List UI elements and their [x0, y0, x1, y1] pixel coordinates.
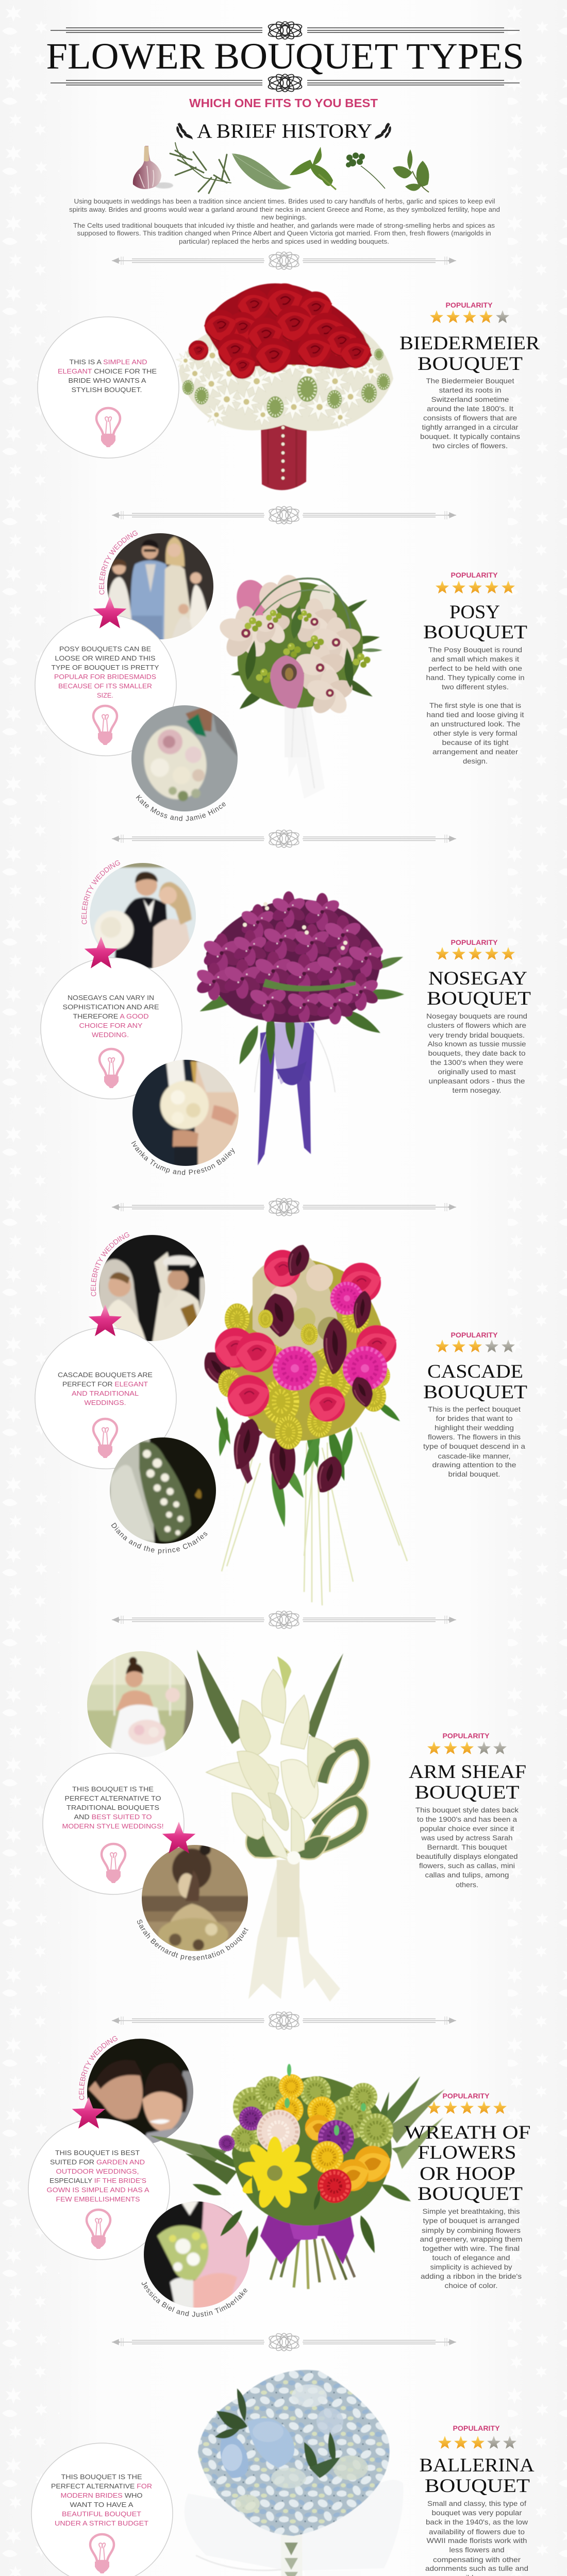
- caption: Jessica Biel and Justin Timberlake: [141, 2281, 247, 2317]
- panel: ballerina bouquet: [31, 2370, 535, 2576]
- panel: posy bouquet: [35, 531, 527, 821]
- heading: posy bouquet: BOUQUET: [423, 622, 527, 643]
- tip text: THIS BOUQUET IS BEST: [55, 2149, 140, 2157]
- description: [425, 2499, 528, 2576]
- icon: herb sprig: [393, 149, 429, 192]
- description: simplicity is achieved by: [430, 2263, 512, 2271]
- description: [420, 377, 520, 450]
- tip text: AND TRADITIONAL: [72, 1389, 139, 1397]
- celebrity photo: justin timberlake and jessica biel: [79, 2036, 193, 2143]
- description: bouquet. It typically contains: [420, 432, 520, 440]
- tip circle: [28, 2119, 170, 2260]
- tip circle: [31, 2443, 173, 2576]
- description: tightly arranged in a circular: [422, 423, 519, 431]
- tip text: FEW EMBELLISHMENTS: [56, 2195, 140, 2203]
- description: Switzerland sometime: [431, 395, 509, 403]
- description: two circles of flowers.: [432, 442, 508, 450]
- heading: ballerina bouquet: BOUQUET: [425, 2476, 530, 2497]
- description: highlight their wedding: [435, 1423, 514, 1432]
- description: started its roots in: [439, 386, 501, 394]
- icon: garlic: [133, 146, 173, 189]
- history text block: supposed to flowers. This tradition changed when Prince Albert and Queen Victoria got married. From then, fresh flowers (marigolds in: [77, 230, 491, 237]
- celebrity photo: ivanka trump and husband: [81, 860, 196, 969]
- description: [415, 1806, 519, 1889]
- title: FLOWER BOUQUET TYPES: [46, 36, 524, 77]
- tip text: THIS BOUQUET IS THE: [61, 2473, 142, 2481]
- heading: biedermeier bouquet: [399, 333, 540, 375]
- photo: bride on swing: [87, 1651, 193, 1752]
- description: bridal bouquet.: [448, 1470, 500, 1478]
- description: other style is very formal: [433, 729, 518, 737]
- celebrity bouquet photo: sarah bernardt: [137, 1845, 248, 1960]
- popularity stars: 5 of 5: [436, 581, 515, 594]
- tip circle: [41, 958, 182, 1099]
- description: simply by combining flowers: [422, 2226, 521, 2234]
- popularity label: POPULARITY: [445, 301, 493, 309]
- description: adornments such as tulle and: [425, 2564, 528, 2572]
- tip text: UNDER A STRICT BUDGET: [55, 2519, 148, 2527]
- description: drawing attention to the: [432, 1461, 516, 1469]
- tip text: WANT TO HAVE A: [70, 2501, 134, 2509]
- tip text: LOOSE OR WIRED AND THIS: [55, 654, 156, 662]
- tip text: [62, 1785, 164, 1830]
- heading: arm sheaf bouquet: ARM SHEAF: [409, 1761, 526, 1783]
- bouquet image: purple alstroemeria with ribbon: [194, 891, 405, 1165]
- tip text: NOSEGAYS CAN VARY IN: [68, 994, 154, 1002]
- description: bouquet was very popular: [432, 2509, 522, 2517]
- tip text: BRIDE WHO WANTS A: [68, 377, 146, 384]
- tip text: MODERN STYLE WEDDINGS!: [62, 1822, 164, 1830]
- description: callas and tulips, among: [425, 1871, 509, 1879]
- icon: rosemary: [170, 143, 231, 193]
- description: hand. They typically come in: [426, 673, 525, 682]
- celebrity photo: kate moss wedding party: [99, 531, 213, 639]
- tip text: POPULAR FOR BRIDESMAIDS: [54, 673, 156, 681]
- icon: pink star: [72, 2097, 105, 2129]
- description: the 1300's when they were: [430, 1058, 523, 1066]
- celebrity photo: diana and prince charles: [91, 1232, 205, 1341]
- icon: light bulb: [87, 2210, 110, 2249]
- history text block: [69, 198, 500, 245]
- description: WWII made florists work with: [427, 2536, 527, 2545]
- icon: parsley: [346, 152, 385, 189]
- popularity label: POPULARITY: [442, 1732, 490, 1740]
- heading: cascade bouquet: BOUQUET: [423, 1382, 527, 1403]
- panel: nosegay bouquet: [40, 860, 531, 1175]
- tip text: THIS IS A SIMPLE AND: [69, 358, 147, 366]
- description: was used by actress Sarah: [421, 1834, 512, 1842]
- tip text: [63, 994, 159, 1039]
- popularity stars: 3 of 5: [427, 1741, 507, 1754]
- heading: ballerina bouquet: [420, 2455, 535, 2497]
- tip text: [46, 2149, 149, 2203]
- celebrity bouquet photo: [110, 1437, 216, 1555]
- history text block: The Celts used traditional bouquets that inlcuded ivy thistle and heather, and garlands were made of strong-smelling herbs and spices as: [73, 222, 495, 229]
- description: The Biedermeier Bouquet: [426, 377, 514, 385]
- tip text: [58, 358, 157, 394]
- bouquet image: red roses and white star flowers: [176, 283, 393, 490]
- tip text: TYPE OF BOUQUET IS PRETTY: [52, 664, 159, 671]
- history text block: new beginings.: [261, 214, 307, 221]
- icon: pink star: [162, 1822, 195, 1854]
- popularity label: POPULARITY: [451, 938, 498, 946]
- popularity stars: 3 of 5: [436, 1340, 515, 1352]
- heading: wreath of flowers or hoop bouquet: FLOWERS: [418, 2142, 516, 2163]
- description: choice of color.: [444, 2281, 498, 2290]
- description: because of its tight: [442, 738, 509, 747]
- description: beautifully displays elongated: [416, 1852, 518, 1860]
- description: touch of elegance and: [432, 2253, 510, 2262]
- description: others.: [456, 1880, 478, 1889]
- bouquet image: hot pink cascade: [198, 1242, 407, 1605]
- description: an unstructured look. The: [430, 720, 521, 728]
- description: This bouquet style dates back: [415, 1806, 519, 1814]
- herbs row: [133, 143, 429, 193]
- heading: wreath of flowers or hoop bouquet: BOUQUET: [418, 2183, 523, 2205]
- bouquet image: posy of orchids and calla: [217, 575, 382, 799]
- bouquet image: blue hydrangea with tulle: [185, 2370, 403, 2576]
- tip text: SOPHISTICATION AND ARE: [63, 1003, 159, 1011]
- popularity label: POPULARITY: [451, 1331, 498, 1339]
- description: together with wire. The final: [423, 2244, 520, 2252]
- caption: Diana and the prince Charles: [111, 1522, 207, 1555]
- heading: posy bouquet: [423, 602, 527, 643]
- tip text: BEAUTIFUL BOUQUET: [62, 2510, 141, 2518]
- description: originally used to mast: [438, 1067, 516, 1076]
- popularity label: POPULARITY: [442, 2092, 490, 2100]
- description: [423, 1405, 525, 1478]
- description: around the late 1800's. It: [427, 404, 513, 413]
- tip text: [58, 1371, 153, 1406]
- header ornament top: [51, 20, 520, 41]
- header ornament bottom: [51, 72, 520, 94]
- icon: light bulb: [96, 408, 120, 447]
- celebrity bouquet photo: [141, 2201, 250, 2317]
- tip text: PERFECT ALTERNATIVE TO: [65, 1794, 161, 1802]
- tip text: [52, 645, 159, 699]
- history text block: particular) replaced the herbs and spices used in wedding bouquets.: [179, 238, 389, 245]
- icon: pink star: [89, 1304, 122, 1336]
- heading: wreath of flowers or hoop bouquet: WREATH OF: [404, 2122, 531, 2143]
- description: less flowers and: [449, 2546, 504, 2554]
- description: perfect to be held with one: [428, 664, 522, 672]
- tip circle: [35, 615, 176, 756]
- description: flowers, such as callas, mini: [419, 1861, 515, 1870]
- icon: bay leaf: [232, 154, 291, 190]
- description: [426, 1012, 527, 1094]
- description: and greenery, wrapping them: [420, 2235, 523, 2243]
- description: compensating with other: [433, 2555, 521, 2564]
- heading: arm sheaf bouquet: BOUQUET: [414, 1782, 520, 1803]
- description: adding a ribbon in the bride's: [421, 2272, 522, 2280]
- heading: posy bouquet: POSY: [449, 602, 500, 623]
- description: [420, 2207, 523, 2290]
- description: Simple yet breathtaking, this: [423, 2207, 520, 2215]
- description: unpleasant odors - thus the: [429, 1077, 525, 1085]
- popularity label: POPULARITY: [451, 571, 498, 579]
- tip text: CHOICE FOR ANY: [79, 1022, 143, 1029]
- panel: cascade bouquet: [35, 1232, 527, 1606]
- description: Bernardt. This bouquet: [427, 1843, 507, 1851]
- caption arc: CELEBRITY WEDDING: [91, 1232, 130, 1296]
- heading: arm sheaf bouquet: [409, 1761, 526, 1803]
- description: The Posy Bouquet is round: [428, 646, 522, 654]
- heading: nosegay bouquet: [427, 968, 531, 1009]
- description: for brides that want to: [436, 1414, 513, 1422]
- description: hand tied and loose giving it: [427, 710, 524, 719]
- icon: light bulb: [102, 1844, 125, 1883]
- icon: left laurel: [176, 122, 193, 140]
- description: arrangement and neater: [432, 748, 518, 756]
- description: The first style is one that is: [429, 701, 521, 709]
- tip text: WEDDINGS.: [85, 1399, 126, 1406]
- caption: Ivanka Trump and Preston Bailey: [131, 1141, 235, 1175]
- celebrity bouquet photo: [131, 705, 238, 821]
- tip text: [51, 2473, 152, 2527]
- caption: Sarah Bernardt presentation bouquet: [137, 1920, 248, 1960]
- description: type of bouquet is arranged: [423, 2216, 520, 2225]
- icon: light bulb: [99, 1049, 123, 1088]
- icon: light bulb: [90, 2534, 114, 2573]
- tip text: WEDDING.: [92, 1031, 129, 1039]
- tip text: PERFECT FOR ELEGANT: [62, 1380, 148, 1388]
- description: type of bouquet descend in a: [423, 1442, 525, 1450]
- tip circle: [38, 317, 179, 458]
- description: to the 1900's and has been a: [417, 1815, 517, 1823]
- tip text: GOWN IS SIMPLE AND HAS A: [46, 2186, 149, 2194]
- description: two different styles.: [442, 683, 509, 691]
- icon: light bulb: [93, 706, 117, 745]
- tip text: PERFECT ALTERNATIVE FOR: [51, 2482, 152, 2490]
- panel: arm sheaf bouquet: [42, 1650, 526, 2001]
- caption arc: CELEBRITY WEDDING: [79, 2036, 118, 2100]
- tip text: AND BEST SUITED TO: [74, 1813, 152, 1821]
- description: clusters of flowers which are: [427, 1021, 526, 1029]
- tip text: SUITED FOR GARDEN AND: [50, 2158, 145, 2166]
- heading: nosegay bouquet: BOUQUET: [427, 988, 531, 1009]
- description: design.: [463, 757, 488, 765]
- tip text: STYLISH BOUQUET.: [71, 386, 142, 394]
- celebrity bouquet photo: [131, 1060, 239, 1175]
- description: Small and classy, this type of: [427, 2499, 526, 2507]
- tip circle: [43, 1753, 184, 1894]
- popularity stars: 3 of 5: [438, 2436, 516, 2449]
- description: [426, 646, 525, 765]
- tip text: ELEGANT CHOICE FOR THE: [58, 367, 157, 375]
- description: very trendy bridal bouquets.: [429, 1031, 525, 1039]
- bouquet image: white callas with ribbon: [197, 1650, 364, 2002]
- tip text: TRADITIONAL BOUQUETS: [66, 1804, 159, 1811]
- tip text: CASCADE BOUQUETS ARE: [58, 1371, 153, 1379]
- tip text: ESPECIALLY IF THE BRIDE'S: [49, 2177, 146, 2184]
- heading: a brief history: A BRIEF HISTORY: [197, 120, 372, 142]
- bouquet image: mixed yellow and purple hoop bouquet: [150, 2064, 445, 2289]
- heading: biedermeier bouquet: BOUQUET: [418, 353, 523, 375]
- description: and small which makes it: [431, 655, 519, 663]
- icon: pink star: [93, 597, 126, 629]
- caption arc: CELEBRITY WEDDING: [99, 531, 138, 595]
- heading: biedermeier bouquet: BIEDERMEIER: [399, 333, 540, 354]
- tip text: OUTDOOR WEDDINGS,: [56, 2167, 139, 2175]
- heading: ballerina bouquet: BALLERINA: [420, 2455, 535, 2476]
- icon: right laurel: [375, 122, 392, 140]
- panel: wreath of flowers or hoop bouquet: [28, 2036, 531, 2317]
- heading: wreath of flowers or hoop bouquet: [404, 2122, 531, 2205]
- description: consists of flowers that are: [423, 414, 517, 422]
- tip text: POSY BOUQUETS CAN BE: [59, 645, 151, 653]
- popularity label: POPULARITY: [453, 2424, 500, 2432]
- icon: pink star: [85, 937, 118, 969]
- tip text: THIS BOUQUET IS THE: [72, 1785, 154, 1793]
- description: cascade-like manner,: [438, 1452, 510, 1460]
- heading: cascade bouquet: CASCADE: [427, 1361, 523, 1382]
- description: back in the 1940's, as the low: [426, 2518, 528, 2526]
- description: bouquets, they date back to: [428, 1049, 526, 1057]
- tip text: THEREFORE A GOOD: [73, 1012, 148, 1020]
- heading: wreath of flowers or hoop bouquet: OR HOOP: [420, 2163, 515, 2184]
- popularity stars: 5 of 5: [427, 2101, 507, 2114]
- heading: cascade bouquet: [423, 1361, 527, 1403]
- description: availability of flowers due to: [429, 2528, 525, 2536]
- icon: mint: [290, 147, 336, 190]
- popularity stars: 5 of 5: [436, 947, 515, 960]
- description: term nosegay.: [453, 1086, 501, 1094]
- description: popular choice ever since it: [420, 1824, 514, 1833]
- description: flowers. The flowers in this: [428, 1433, 521, 1441]
- tip text: SIZE.: [97, 691, 113, 699]
- icon: light bulb: [93, 1419, 117, 1458]
- heading: nosegay bouquet: NOSEGAY: [428, 968, 527, 989]
- subtitle: WHICH ONE FITS TO YOU BEST: [189, 96, 378, 110]
- history text block: Using bouquets in weddings has been a tradition since ancient times. Brides used to cary handfuls of herbs, garlic and spices to keep evil: [74, 198, 495, 205]
- caption arc: CELEBRITY WEDDING: [81, 860, 121, 924]
- panel: biedermeier bouquet: [38, 283, 540, 490]
- description: Nosegay bouquets are round: [426, 1012, 527, 1020]
- popularity stars: 4 of 5: [430, 310, 509, 323]
- history text block: spirits away. Brides and grooms would wear a garland around their necks in ancient Greece and Rome, as they symbolized fertility, hope and: [69, 206, 500, 213]
- tip text: BECAUSE OF ITS SMALLER: [58, 682, 152, 690]
- caption: Kate Moss and Jamie Hince: [136, 794, 226, 821]
- tip circle: [35, 1328, 176, 1469]
- tip text: MODERN BRIDES WHO: [61, 2492, 142, 2499]
- description: Also known as tussie mussie: [428, 1040, 526, 1048]
- description: This is the perfect bouquet: [428, 1405, 521, 1413]
